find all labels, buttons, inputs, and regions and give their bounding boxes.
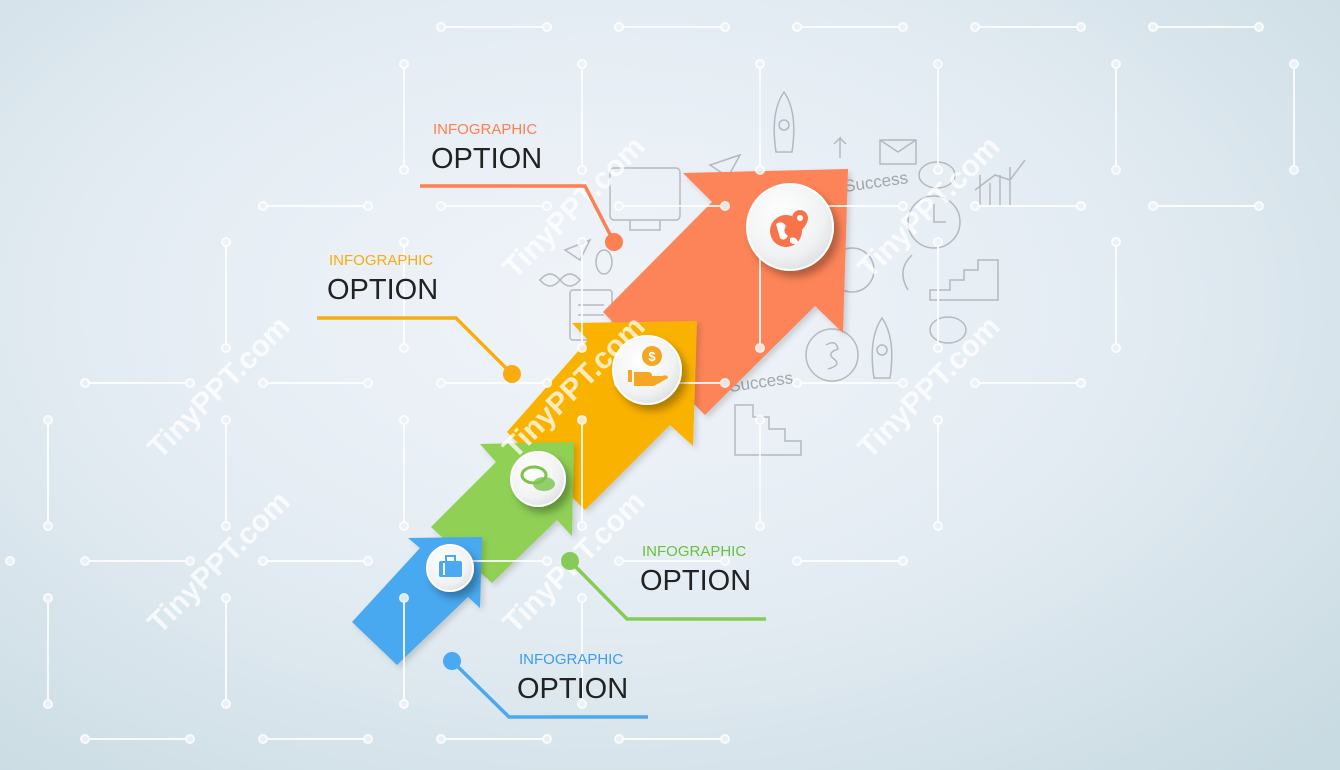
label: orange option: INFOGRAPHIC: [433, 121, 537, 138]
label: green option: OPTION: [640, 565, 751, 597]
watermarks: TinyPPT.com: [852, 130, 1007, 285]
text: Success: [728, 368, 794, 396]
icon circle: money hand (yellow): $: [648, 349, 656, 364]
watermarks: TinyPPT.com: [497, 485, 652, 640]
label: yellow option: [317, 252, 521, 383]
watermarks: TinyPPT.com: [142, 485, 297, 640]
label: blue option: [443, 651, 648, 717]
icon circle: money hand (yellow): [613, 336, 681, 404]
watermarks: TinyPPT.com: [497, 130, 652, 285]
label: yellow option: OPTION: [327, 274, 438, 306]
label: orange option: OPTION: [431, 143, 542, 175]
arrow: yellow: [507, 321, 697, 510]
icon circle: globe (orange): [747, 184, 833, 270]
watermarks: [142, 130, 1007, 640]
text: Success: [843, 168, 909, 196]
label: green option: [561, 543, 766, 619]
icon circle: briefcase (blue): [427, 545, 473, 591]
label: blue option: INFOGRAPHIC: [519, 651, 623, 668]
icon circle: chat (green): [511, 452, 565, 506]
arrow: blue: [352, 537, 482, 665]
label: orange option: [420, 121, 623, 251]
watermarks: TinyPPT.com: [142, 310, 297, 465]
label: blue option: OPTION: [517, 673, 628, 705]
arrow: orange: [603, 169, 848, 415]
watermarks: TinyPPT.com: [852, 310, 1007, 465]
label: green option: INFOGRAPHIC: [642, 543, 746, 560]
doodles: business sketches: [540, 92, 1025, 455]
watermarks: TinyPPT.com: [497, 310, 652, 465]
label: yellow option: INFOGRAPHIC: [329, 252, 433, 269]
arrow: green: [431, 442, 574, 583]
